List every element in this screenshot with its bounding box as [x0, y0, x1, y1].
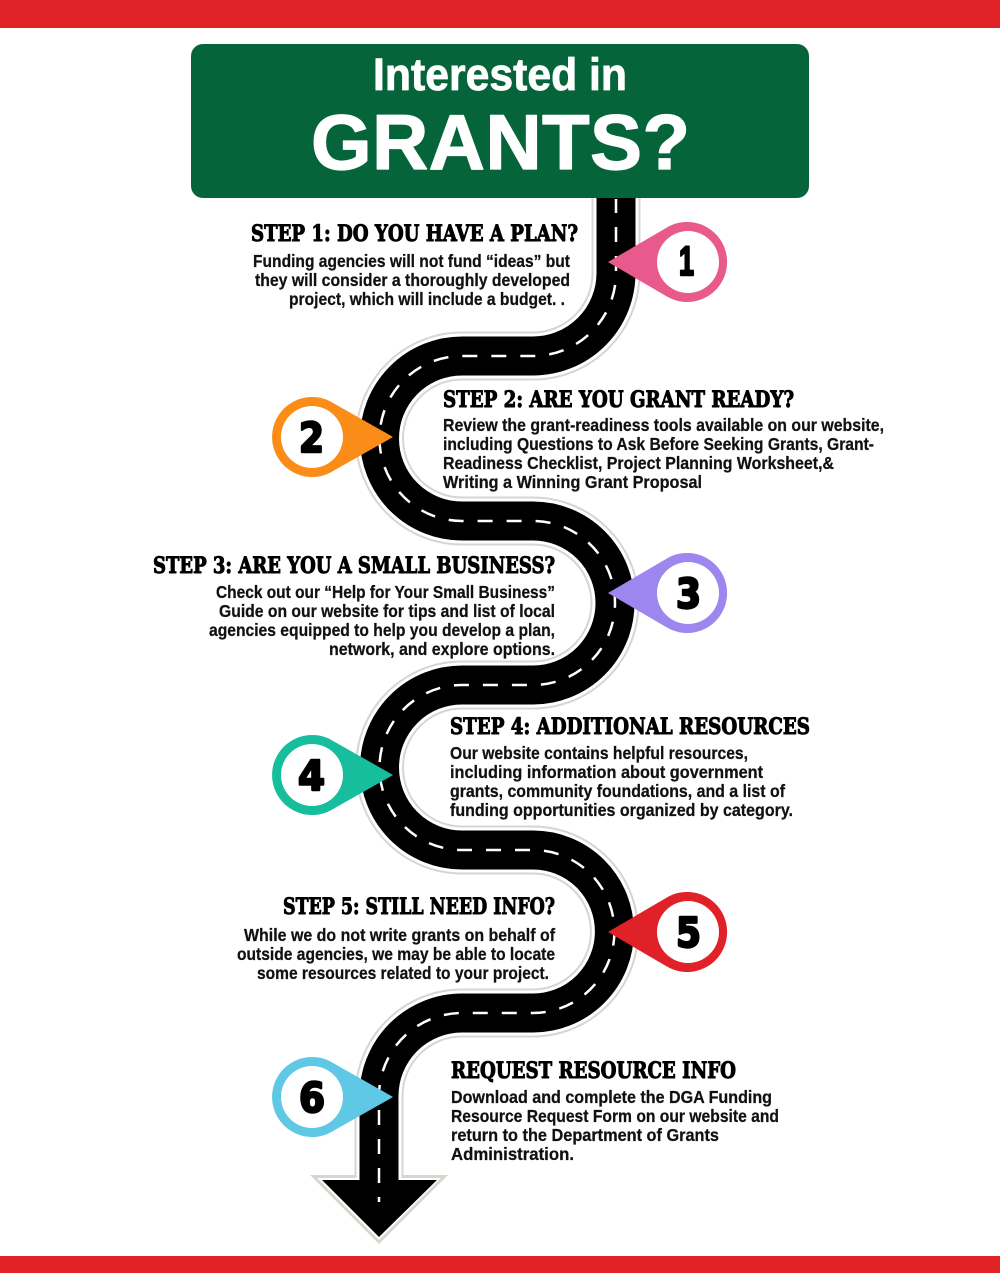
request resource info text: Administration.: [451, 1144, 574, 1164]
title line: Interested in: Interested in: [373, 49, 627, 100]
pin 4: [272, 735, 393, 815]
step 4 text: grants, community foundations, and a list of: [450, 781, 785, 801]
step 4 text: [450, 714, 810, 820]
pin 4: 4: [298, 752, 325, 800]
step 3 text: agencies equipped to help you develop a plan,: [209, 620, 555, 640]
pin 3: [608, 553, 727, 633]
step 5 text: some resources related to your project.: [257, 963, 549, 983]
step 4 text: including information about government: [450, 762, 763, 782]
pin 5: [608, 892, 727, 972]
step 1 text: STEP 1: DO YOU HAVE A PLAN?: [251, 221, 578, 247]
request resource info text: REQUEST RESOURCE INFO: [451, 1058, 736, 1084]
step 4 text: funding opportunities organized by category.: [450, 800, 793, 820]
title line: GRANTS?: GRANTS?: [311, 98, 690, 186]
step 2 text: Readiness Checklist, Project Planning Worksheet,&: [443, 453, 834, 473]
step 3 text: STEP 3: ARE YOU A SMALL BUSINESS?: [153, 553, 555, 579]
step 1 text: project, which will include a budget. .: [289, 289, 565, 309]
pin 3: 3: [676, 570, 701, 618]
pin 5: 5: [676, 909, 701, 957]
step 3 text: Check out our “Help for Your Small Business”: [216, 582, 555, 602]
title sign: [191, 44, 809, 198]
step 3 text: [153, 553, 555, 659]
step 2 text: including Questions to Ask Before Seeking Grants, Grant-: [443, 434, 874, 454]
step 1 text: they will consider a thoroughly developed: [255, 270, 570, 290]
request resource info text: return to the Department of Grants: [451, 1125, 719, 1145]
pin 6: 6: [299, 1074, 325, 1122]
step 3 text: network, and explore options.: [329, 639, 555, 659]
request resource info text: Download and complete the DGA Funding: [451, 1087, 772, 1107]
step 2 text: STEP 2: ARE YOU GRANT READY?: [443, 387, 794, 413]
step 5 text: STEP 5: STILL NEED INFO?: [283, 894, 555, 920]
top red bar: [0, 0, 1000, 28]
step 2 text: [443, 387, 884, 492]
step 4 text: STEP 4: ADDITIONAL RESOURCES: [450, 714, 810, 740]
step 5 text: [237, 894, 555, 983]
pin 1: [608, 222, 727, 302]
pin 6: [272, 1057, 393, 1137]
bottom red bar: [0, 1256, 1000, 1273]
pin 2: [272, 397, 393, 477]
request resource info text: Resource Request Form on our website and: [451, 1106, 779, 1126]
step 1 text: Funding agencies will not fund “ideas” but: [253, 251, 570, 271]
step 5 text: outside agencies, we may be able to locate: [237, 944, 555, 964]
step 1 text: [251, 221, 578, 309]
request resource info text: [451, 1058, 779, 1164]
step 5 text: While we do not write grants on behalf of: [244, 925, 555, 945]
step 3 text: Guide on our website for tips and list of local: [219, 601, 555, 621]
step 2 text: Review the grant-readiness tools available on our website,: [443, 415, 884, 435]
step 2 text: Writing a Winning Grant Proposal: [443, 472, 702, 492]
pin 1: 1: [679, 238, 694, 284]
pin 2: 2: [299, 414, 324, 462]
step 4 text: Our website contains helpful resources,: [450, 743, 748, 763]
winding road with arrow: [310, 190, 616, 1244]
